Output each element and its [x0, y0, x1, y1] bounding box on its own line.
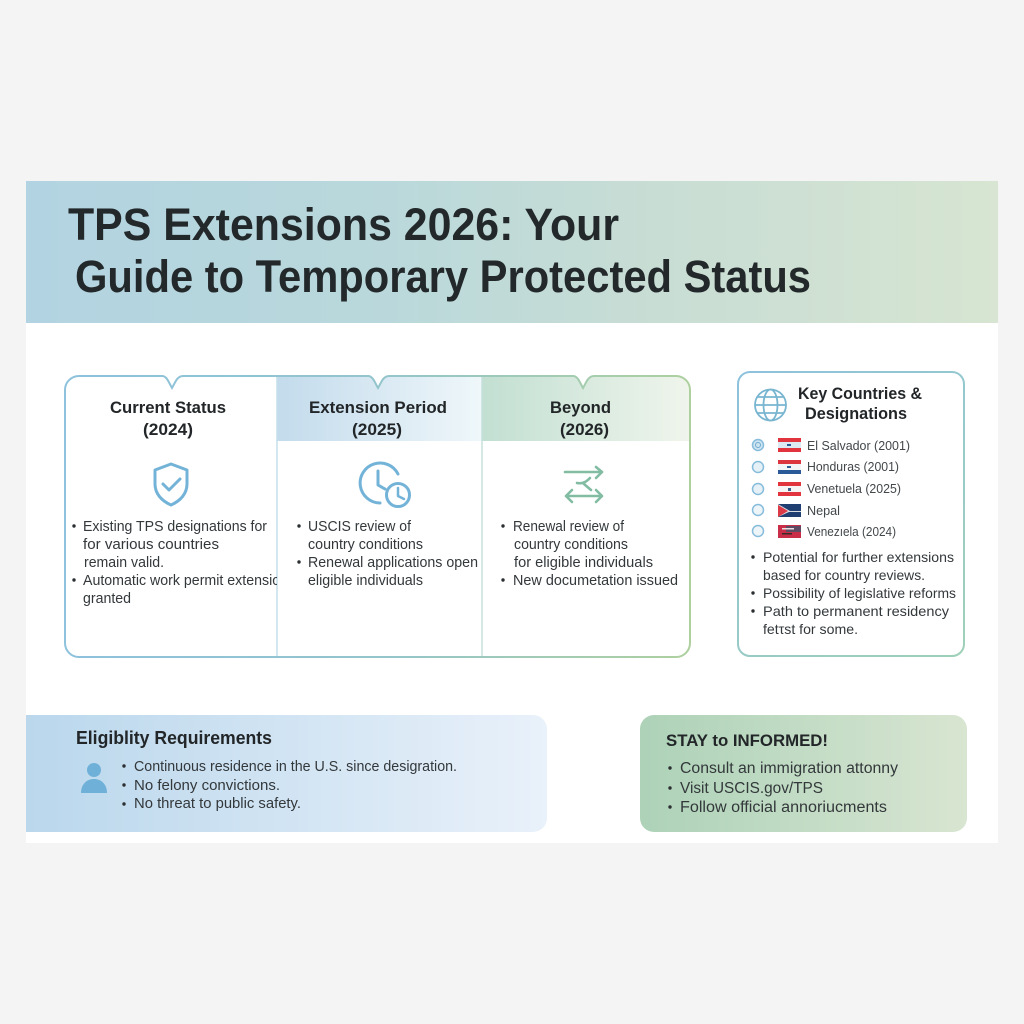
row: Nepal	[752, 504, 840, 518]
icon: globe	[755, 390, 786, 420]
text: outlook bullets: based for country reviews.	[763, 567, 925, 583]
text: beyond bullets: for eligible individuals	[514, 555, 653, 571]
text: stay informed bullets: Consult an immigration attonny	[680, 760, 898, 777]
text: eligibility bullets: No felony convictions.	[134, 778, 280, 794]
text: current status bullets: remain valid.	[84, 555, 164, 571]
row: Nepal: Nepal	[807, 504, 840, 518]
row: Venezıela: Venezıela (2024)	[807, 525, 896, 539]
title	[68, 199, 811, 302]
text: stay informed bullets: Visit USCIS.gov/TPS	[680, 780, 823, 797]
text: current status bullets: Existing TPS designations for	[83, 519, 267, 535]
heading: current status	[110, 399, 226, 439]
text: extension bullets: USCIS review of	[308, 519, 412, 535]
text: extension bullets: country conditions	[308, 537, 423, 553]
panel: stay informed	[640, 715, 967, 832]
text: current status bullets: granted	[83, 591, 131, 607]
icon: arrows	[565, 467, 602, 502]
text: outlook bullets: fetτst for some.	[763, 621, 858, 637]
background sheet	[26, 181, 998, 843]
heading: key countries	[798, 385, 922, 423]
heading: beyond	[550, 399, 611, 439]
title: Guide to Temporary Protected Status	[75, 251, 811, 302]
column: extension period	[297, 399, 478, 589]
text: beyond bullets: country conditions	[514, 537, 628, 553]
text: current status bullets	[72, 519, 288, 607]
panel: key countries	[738, 372, 964, 656]
heading: extension period	[309, 399, 447, 439]
heading: extension period: Extension Period	[309, 399, 447, 417]
row: Venetuela	[752, 482, 901, 496]
text: outlook bullets: Path to permanent residency	[763, 603, 949, 619]
heading: eligibility: Eligiblity Requirements	[76, 728, 272, 748]
row: Venezıela	[752, 525, 896, 539]
heading: stay informed: STAY to INFORMED!	[666, 731, 828, 750]
heading: current status: (2024)	[143, 421, 193, 439]
row: Honduras	[752, 460, 899, 474]
text: stay informed bullets: Follow official annoriucments	[680, 799, 887, 816]
text: extension bullets: Renewal applications open	[308, 555, 478, 571]
header banner	[26, 181, 998, 323]
heading: beyond: Beyond	[550, 399, 611, 417]
heading: key countries: Designations	[805, 405, 907, 423]
heading: beyond: (2026)	[560, 421, 609, 439]
text: eligibility bullets: Continuous residence in the U.S. since desigration.	[134, 759, 457, 775]
text: eligibility bullets: No threat to public safety.	[134, 796, 301, 812]
row: Venetuela: Venetuela (2025)	[807, 482, 901, 496]
row: El Salvador	[752, 438, 910, 453]
text: current status bullets: Automatic work permit extension	[83, 573, 288, 589]
title: TPS Extensions 2026: Your	[68, 199, 619, 250]
text: current status bullets: for various countries	[83, 537, 219, 553]
heading: key countries: Key Countries &	[798, 385, 922, 403]
icon: clocks	[360, 463, 410, 506]
icon: person	[81, 763, 107, 793]
text: beyond bullets: New documetation issued	[513, 573, 678, 589]
panel: eligibility requirements	[26, 715, 547, 832]
text: extension bullets	[297, 519, 478, 589]
heading: current status: Current Status	[110, 399, 226, 417]
column: current status	[72, 399, 288, 607]
text: outlook bullets: Possibility of legislative reforms	[763, 585, 956, 601]
list: countries	[752, 438, 910, 539]
panel: timeline	[65, 370, 691, 657]
text: beyond bullets	[501, 519, 678, 589]
text: outlook bullets: Potential for further extensions	[763, 549, 954, 565]
column: beyond	[501, 399, 678, 589]
text: eligibility bullets	[122, 759, 457, 812]
heading: extension period: (2025)	[352, 421, 402, 439]
text: beyond bullets: Renewal review of	[513, 519, 625, 535]
text: stay informed bullets	[668, 760, 898, 816]
row: Honduras: Honduras (2001)	[807, 460, 899, 474]
row: El Salvador: El Salvador (2001)	[807, 439, 910, 453]
text: outlook bullets	[751, 549, 956, 637]
icon: shield	[155, 464, 187, 505]
text: extension bullets: eligible individuals	[308, 573, 423, 589]
